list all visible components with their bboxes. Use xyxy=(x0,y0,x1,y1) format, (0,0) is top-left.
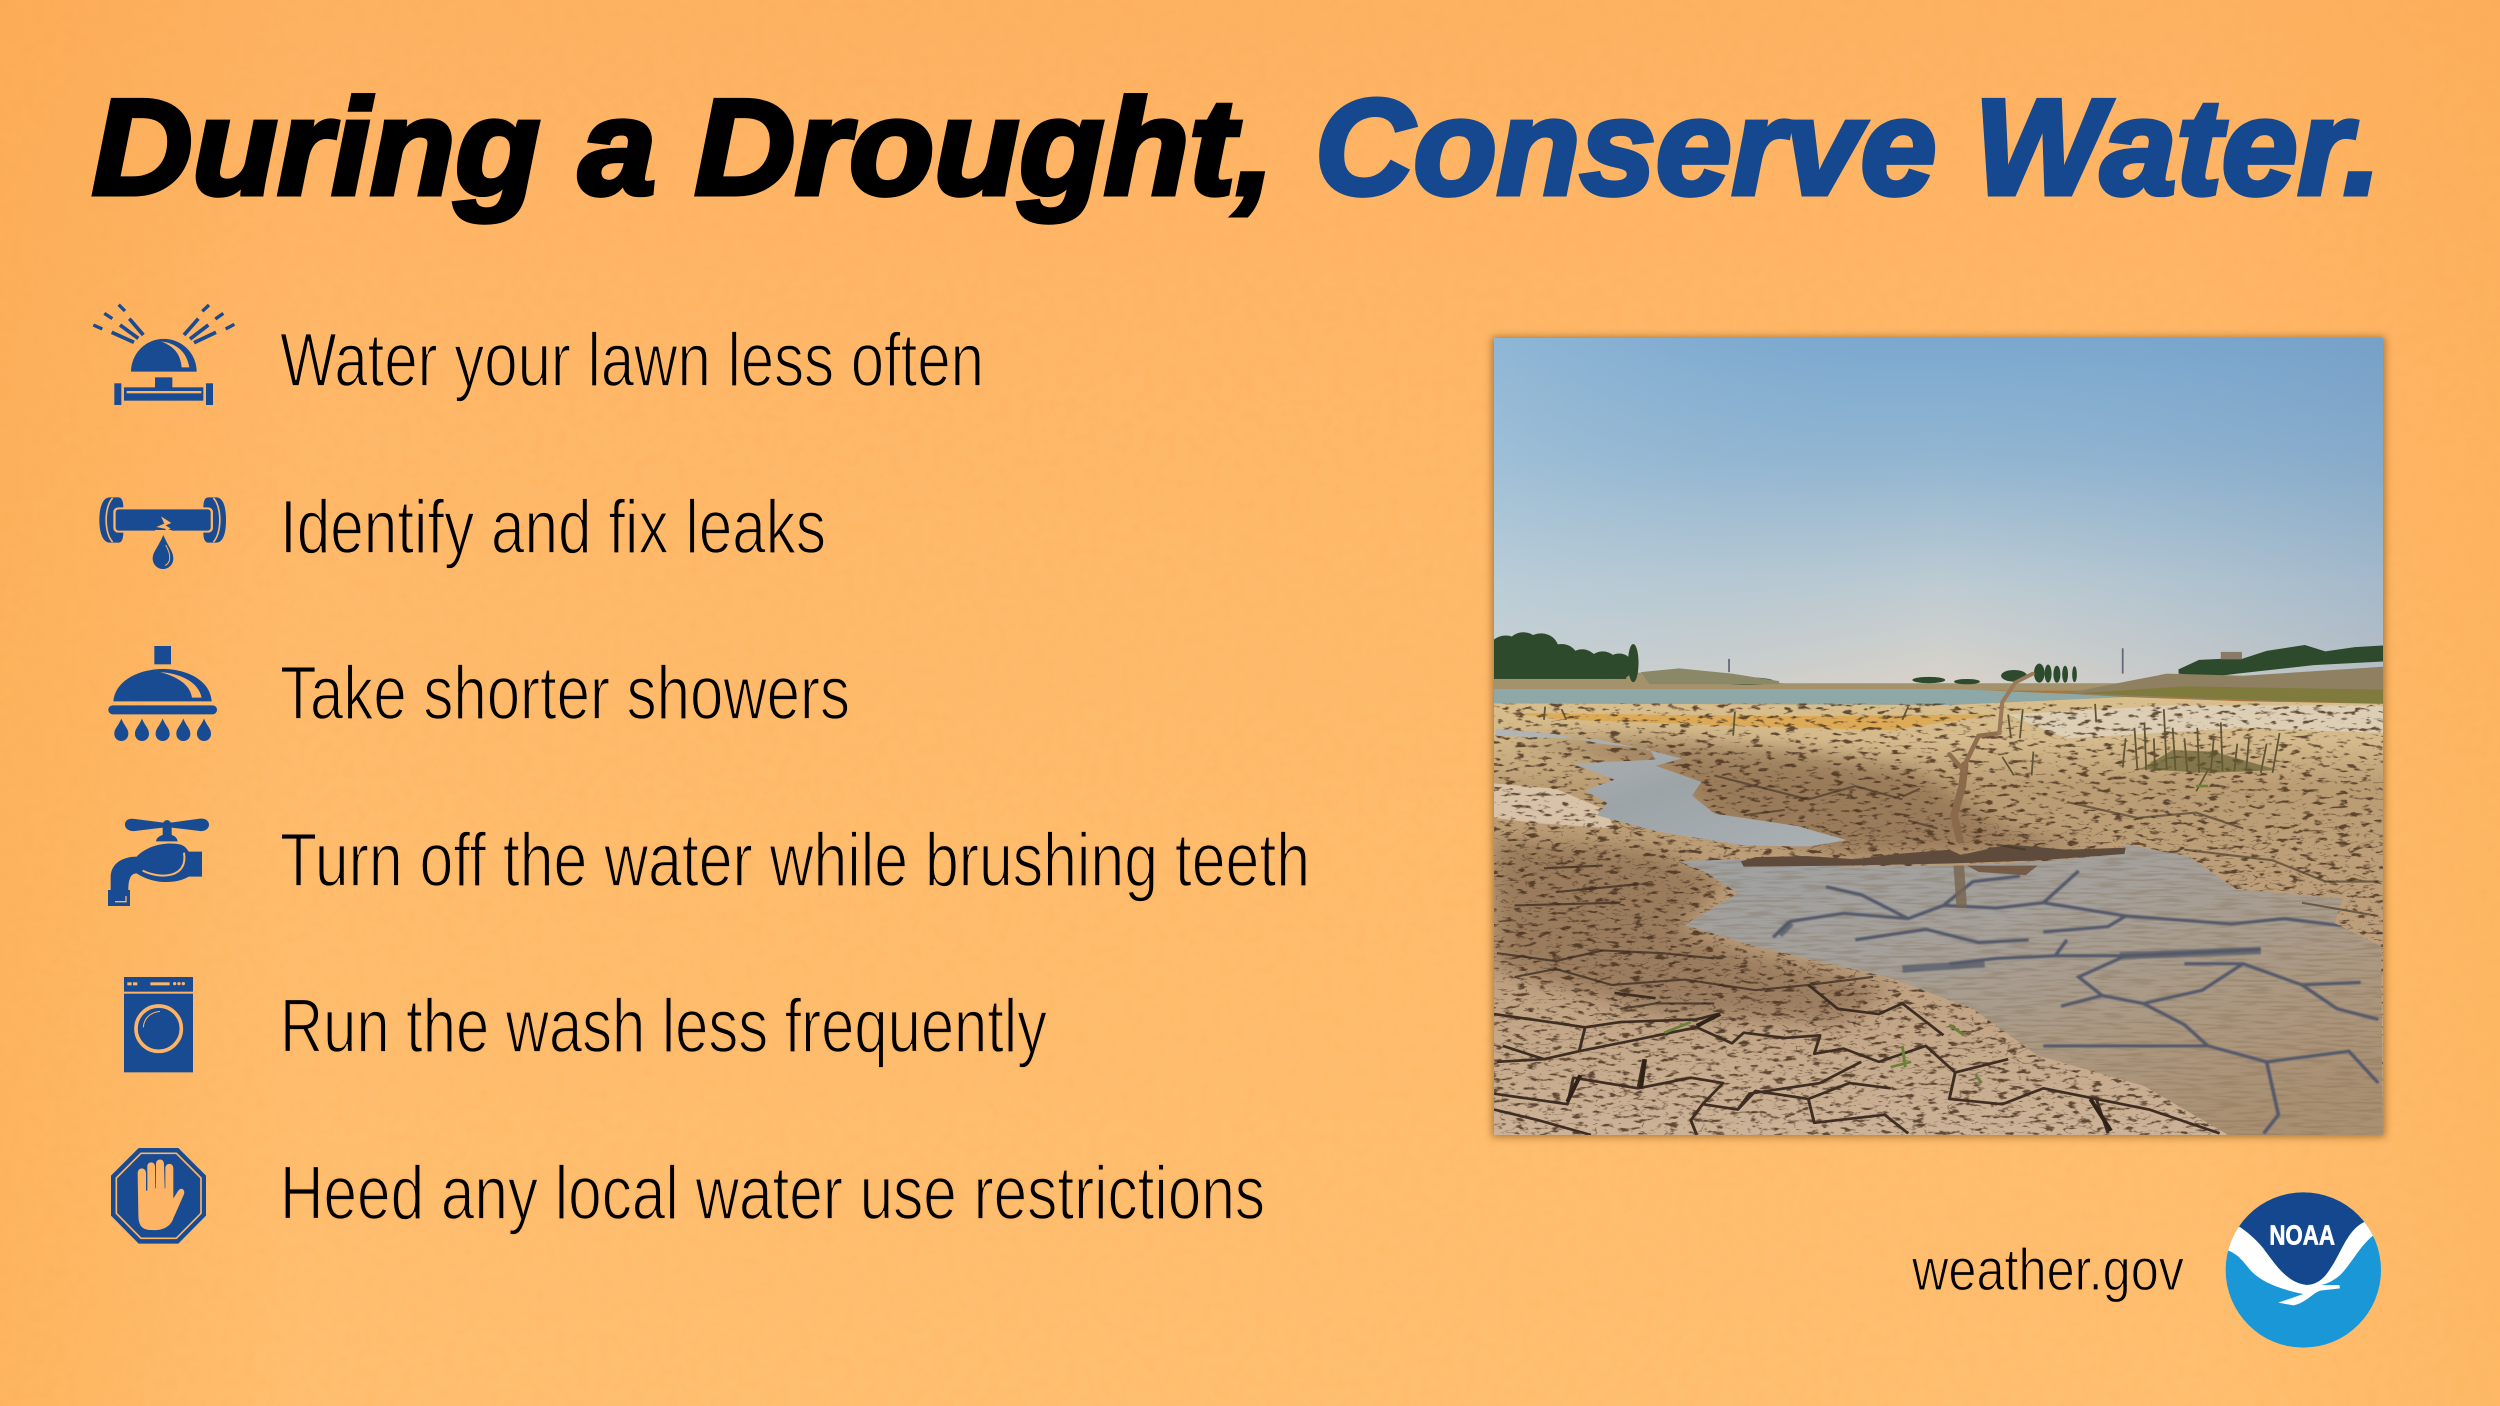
text: fix leaks: Identify and fix leaks xyxy=(280,485,826,570)
icon: shower head xyxy=(108,646,217,741)
website text: weather.gov xyxy=(1911,1237,2184,1303)
mud bank in centre xyxy=(1741,844,2126,867)
far shore and trees xyxy=(1488,632,2383,704)
dead stick xyxy=(1949,674,2033,840)
text: heed restrictions: Heed any local water use restrictions xyxy=(280,1151,1265,1236)
icon: stop hand xyxy=(111,1148,206,1244)
text: water your lawn: Water your lawn less often xyxy=(280,318,984,403)
ground xyxy=(1494,697,2383,1135)
stream xyxy=(1496,729,1847,847)
title: Conserve Water. xyxy=(1315,71,2381,223)
text: shorter showers: Take shorter showers xyxy=(280,651,850,736)
icon: leaking pipe xyxy=(99,497,226,569)
title xyxy=(92,71,2381,223)
text: wash less: Run the wash less frequently xyxy=(280,984,1047,1069)
icon: washing machine xyxy=(124,977,193,1072)
sky xyxy=(1494,338,2383,688)
logo: NOAA xyxy=(2223,1180,2383,1348)
icon: water tap xyxy=(108,819,209,906)
title: During a Drought, xyxy=(92,71,1274,223)
foreground cracks xyxy=(1494,985,2220,1135)
photo: dry cracked lake bed xyxy=(1488,338,2383,1135)
icon: sprinkler xyxy=(93,305,234,405)
dry grass xyxy=(1544,704,2280,791)
tip list xyxy=(93,305,1310,1244)
logo: NOAA: NOAA xyxy=(2269,1219,2335,1250)
far water xyxy=(1494,689,2126,705)
text: turn off water: Turn off the water while brushing teeth xyxy=(280,818,1310,903)
puddle xyxy=(1679,844,2383,1135)
small green tufts xyxy=(1664,786,2208,1083)
photo shadow xyxy=(1492,337,2385,1137)
